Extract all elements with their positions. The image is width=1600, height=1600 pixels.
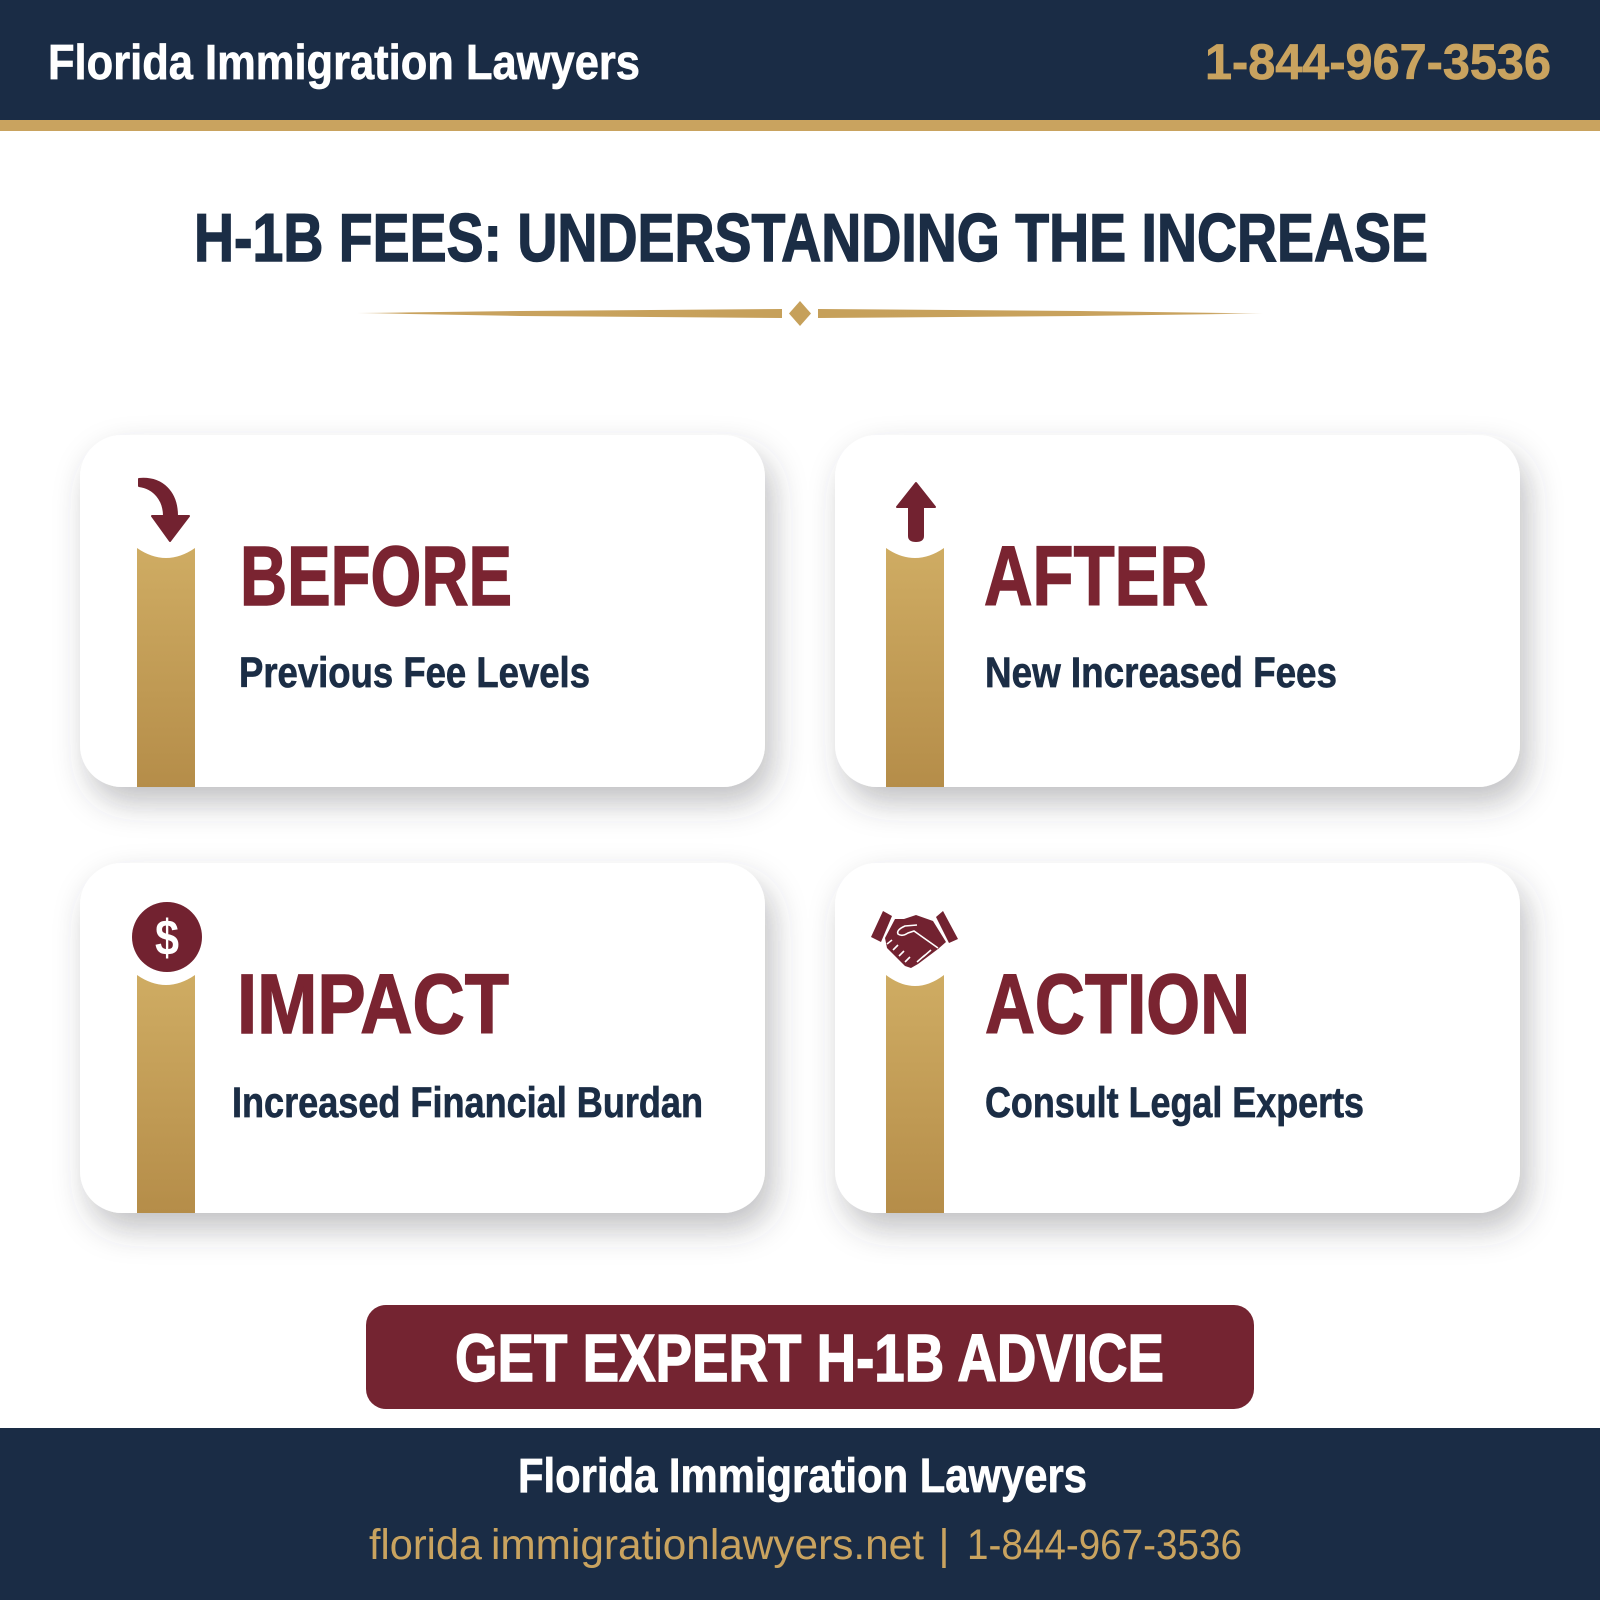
panel: before: [80, 435, 765, 787]
gold bar: [137, 548, 195, 787]
icon: dollar coin: $: [155, 910, 179, 966]
text: previous fee levels: Previous Fee Levels: [239, 649, 590, 697]
footer firm name: Florida Immigration Lawyers: [518, 1450, 1087, 1503]
gold bar: [137, 975, 195, 1213]
footer website and phone: immigrationlawyers.net: [491, 1521, 924, 1569]
call to action button: [366, 1305, 1254, 1409]
text: new increased fees: New Increased Fees: [985, 649, 1337, 697]
heading: action: ACTION: [985, 957, 1250, 1051]
icon: curved down arrow: [139, 479, 189, 541]
header phone number: 1-844-967-3536: [1205, 34, 1551, 90]
header firm name: Florida Immigration Lawyers: [48, 36, 640, 90]
call to action button: GET EXPERT H-1B ADVICE: [455, 1321, 1164, 1396]
footer website and phone: |: [938, 1521, 950, 1569]
gold bar: [886, 548, 944, 787]
footer website and phone: [369, 1521, 1242, 1569]
footer band: [0, 1428, 1600, 1600]
heading: impact: IMPACT: [237, 957, 509, 1051]
footer website and phone: 1-844-967-3536: [967, 1521, 1242, 1569]
header band: [0, 0, 1600, 131]
title divider with diamond: [357, 301, 1263, 326]
text: increased financial burdan: Increased Financial Burdan: [232, 1079, 703, 1127]
panel: impact: [80, 863, 765, 1213]
heading: after: AFTER: [984, 529, 1208, 623]
heading: before: BEFORE: [240, 529, 512, 623]
icon: dollar coin: [132, 902, 202, 972]
text: consult legal experts: Consult Legal Experts: [985, 1079, 1364, 1127]
gold bar: [886, 975, 944, 1213]
icon: up arrow: [897, 483, 935, 541]
panel: after: [835, 435, 1520, 787]
icon: handshake: [871, 911, 958, 968]
footer website and phone: florida: [369, 1521, 482, 1569]
panel: action: [835, 863, 1520, 1213]
